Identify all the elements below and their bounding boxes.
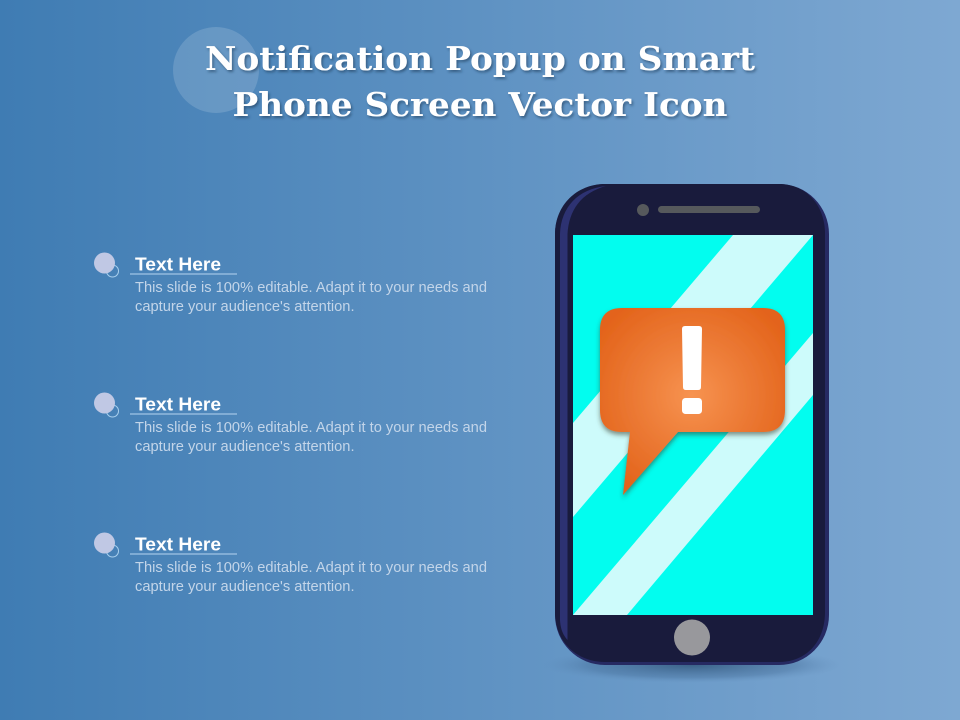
notification speech bubble [600, 308, 785, 495]
title: Notification Popup on Smart [205, 39, 756, 78]
screen [573, 235, 813, 615]
bullet icon 1 [94, 252, 118, 277]
list item 1 [94, 252, 491, 315]
title: Phone Screen Vector Icon [232, 85, 728, 124]
description 1: This slide is 100% editable. Adapt it to your needs and [135, 280, 487, 296]
title [205, 39, 756, 124]
description 2: This slide is 100% editable. Adapt it to your needs and [135, 420, 487, 436]
list item 2 [94, 392, 491, 455]
description 2: capture your audience's attention. [135, 439, 355, 455]
home button [674, 620, 710, 656]
earpiece camera [637, 204, 649, 216]
phone front face [555, 184, 825, 662]
decorative title circle [173, 27, 259, 113]
smartphone [555, 184, 829, 665]
bullet icon 2 [94, 392, 118, 417]
phone left highlight band [560, 186, 606, 640]
description 3: This slide is 100% editable. Adapt it to your needs and [135, 560, 487, 576]
heading 1: Text Here [135, 254, 221, 274]
phone shadow [542, 647, 842, 683]
bubble body [600, 308, 785, 495]
heading 2: Text Here [135, 394, 221, 414]
phone outer casing [555, 184, 829, 665]
heading 3: Text Here [135, 534, 221, 554]
description 1: capture your audience's attention. [135, 299, 355, 315]
list item 3 [94, 532, 491, 595]
speaker [658, 206, 760, 213]
bullet icon 3 [94, 532, 118, 557]
exclamation mark [682, 326, 702, 414]
description 3: capture your audience's attention. [135, 579, 355, 595]
